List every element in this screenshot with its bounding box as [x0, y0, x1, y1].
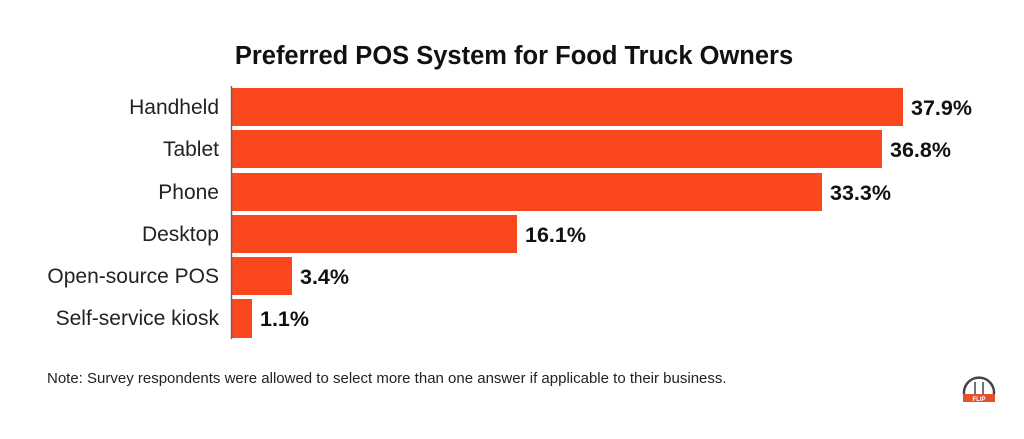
value labels: 33.3% [830, 181, 891, 205]
icon: logo [963, 378, 995, 403]
title: Preferred POS System for Food Truck Owners [235, 42, 793, 70]
category labels: Self-service kiosk [56, 307, 219, 330]
note: Note: Survey respondents were allowed to select more than one answer if applicable to their business. [47, 370, 727, 387]
value labels: 36.8% [890, 138, 951, 162]
category labels: Tablet [163, 138, 219, 161]
value labels [260, 96, 972, 331]
value labels: 16.1% [525, 223, 586, 247]
category labels [47, 96, 219, 330]
category labels: Handheld [129, 96, 219, 119]
value labels: 3.4% [300, 265, 349, 289]
category labels: Desktop [142, 223, 219, 246]
bar chart [47, 86, 972, 339]
category labels: Open-source POS [47, 265, 219, 288]
value labels: 37.9% [911, 96, 972, 120]
bars [232, 88, 903, 338]
category labels: Phone [158, 181, 219, 204]
value labels: 1.1% [260, 307, 309, 331]
icon: logo: FLIP [972, 397, 986, 403]
